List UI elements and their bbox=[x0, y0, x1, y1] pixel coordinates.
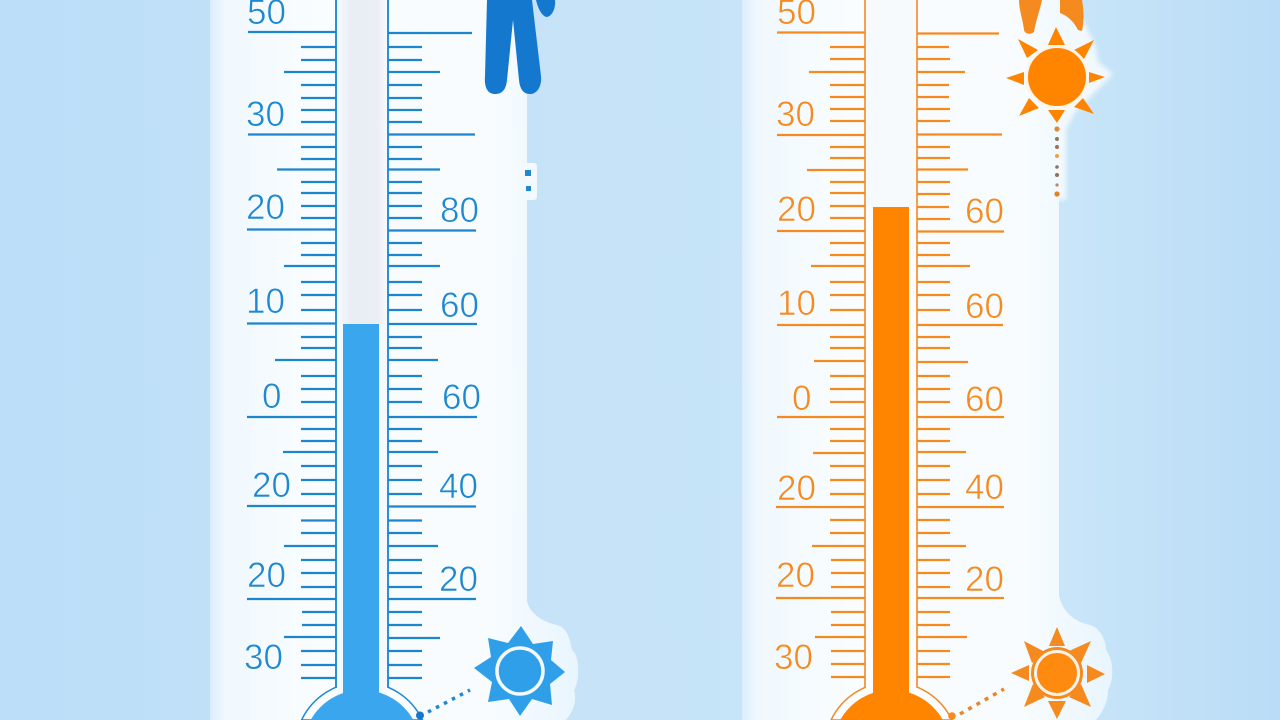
panel background orange bbox=[742, 0, 1112, 720]
tube lower section blue bbox=[337, 324, 387, 696]
left scale numbers blue: 30 bbox=[246, 95, 285, 134]
tube orange bbox=[866, 0, 916, 700]
left scale numbers blue: 0 bbox=[262, 377, 281, 416]
panel: blue thermometer bbox=[210, 0, 578, 720]
right ticks blue bbox=[388, 33, 477, 678]
tube blue bbox=[337, 0, 387, 700]
right scale numbers blue: 20 bbox=[439, 560, 478, 599]
bulb outline blue bbox=[302, 682, 422, 720]
bulb fill blue bbox=[311, 690, 413, 720]
left scale numbers orange: 30 bbox=[774, 638, 813, 677]
left scale numbers orange bbox=[774, 0, 816, 677]
left scale numbers orange: 0 bbox=[792, 379, 811, 418]
right scale numbers orange: 60 bbox=[965, 192, 1004, 231]
mercury column blue bbox=[343, 324, 379, 704]
left scale numbers blue: 20 bbox=[252, 466, 291, 505]
left scale numbers orange: 20 bbox=[776, 556, 815, 595]
right scale numbers orange: 60 bbox=[965, 380, 1004, 419]
panel: orange thermometer bbox=[742, 0, 1113, 720]
scale spines blue bbox=[336, 0, 388, 687]
left scale numbers blue: 20 bbox=[247, 556, 286, 595]
right scale numbers orange: 40 bbox=[965, 468, 1004, 507]
right scale numbers orange: 20 bbox=[965, 560, 1004, 599]
icon: sun top orange bbox=[1006, 27, 1105, 123]
sun halo orange bbox=[1020, 0, 1113, 200]
left scale numbers orange: 20 bbox=[777, 469, 816, 508]
dotted connector bottom orange bbox=[948, 689, 1004, 720]
scale spines orange bbox=[865, 0, 917, 687]
right scale numbers blue: 40 bbox=[439, 467, 478, 506]
mercury column orange bbox=[873, 207, 909, 704]
icon: person legs orange bbox=[1019, 0, 1084, 34]
dotted connector top orange bbox=[1054, 126, 1060, 197]
left scale numbers orange: 30 bbox=[776, 95, 815, 134]
right ticks orange bbox=[917, 34, 1004, 677]
right scale numbers blue bbox=[439, 191, 481, 599]
tube lower section orange bbox=[866, 207, 916, 696]
left scale numbers orange: 20 bbox=[777, 190, 816, 229]
icon: sun blue bbox=[474, 626, 565, 716]
right scale numbers orange: 60 bbox=[965, 287, 1004, 326]
left ticks orange bbox=[776, 32, 865, 677]
left scale numbers blue: 20 bbox=[246, 188, 285, 227]
left scale numbers blue: 10 bbox=[246, 282, 285, 321]
right scale numbers orange bbox=[965, 192, 1004, 599]
icon: person legs blue bbox=[485, 0, 555, 94]
left ticks blue bbox=[247, 32, 336, 678]
left scale numbers blue bbox=[244, 0, 291, 677]
panel background blue bbox=[210, 0, 578, 720]
left scale numbers orange: 10 bbox=[777, 284, 816, 323]
bulb fill orange bbox=[840, 690, 943, 720]
right scale numbers blue: 60 bbox=[440, 286, 479, 325]
dotted connector blue bbox=[416, 690, 470, 720]
small label chip blue bbox=[523, 163, 537, 200]
right scale numbers blue: 60 bbox=[442, 378, 481, 417]
right scale numbers blue: 80 bbox=[440, 191, 479, 230]
left scale numbers blue: 30 bbox=[244, 638, 283, 677]
icon: sun bottom orange bbox=[1011, 627, 1105, 719]
bulb outline orange bbox=[831, 682, 952, 720]
